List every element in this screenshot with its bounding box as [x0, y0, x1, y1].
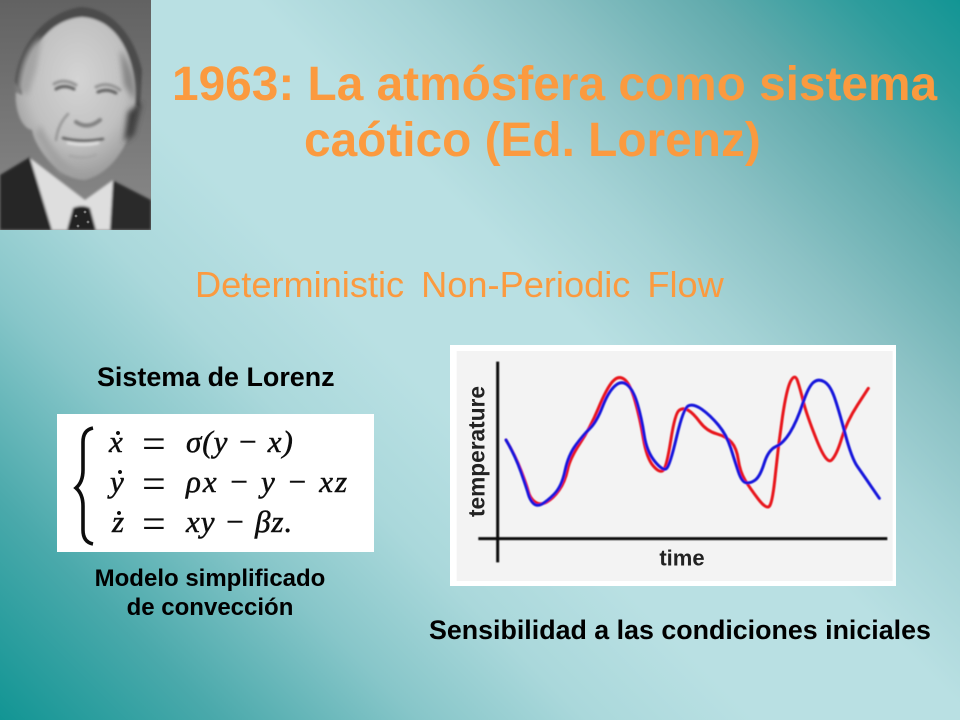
caption: convection model	[95, 565, 325, 621]
equation rows: σ(y − x)	[186, 424, 294, 459]
equation rows: y	[107, 464, 124, 499]
heading: Sistema de Lorenz: Sistema de Lorenz	[97, 362, 335, 392]
axis label: temperature: temperature	[464, 386, 490, 517]
brace	[76, 428, 93, 544]
equation rows: ρx − y − xz	[185, 464, 349, 499]
red curve	[506, 377, 868, 507]
axes	[478, 362, 887, 562]
caption: convection model: Modelo simplificado	[95, 565, 325, 592]
equation rows: =	[142, 462, 166, 508]
equation rows: =	[142, 422, 166, 468]
photo: portrait of Ed. Lorenz	[0, 0, 151, 230]
caption: convection model: de convección	[127, 594, 293, 621]
equation rows: xy − βz.	[185, 504, 293, 539]
title: 1963: La atmósfera como sistema	[172, 58, 937, 111]
title	[172, 58, 938, 167]
equation rows: =	[142, 502, 166, 548]
chart: temperature vs time	[450, 345, 896, 586]
equation rows: z	[111, 504, 124, 539]
subtitle: Deterministic Non-Periodic Flow	[195, 264, 724, 305]
caption: sensitivity to initial conditions: Sensibilidad a las condiciones iniciales	[429, 615, 931, 645]
blue curve	[506, 380, 879, 505]
axis label: time: time	[659, 546, 705, 571]
title: caótico (Ed. Lorenz)	[304, 114, 761, 167]
equation rows	[107, 422, 349, 548]
equation rows: x	[108, 424, 123, 459]
equations: Lorenz system	[57, 414, 374, 552]
